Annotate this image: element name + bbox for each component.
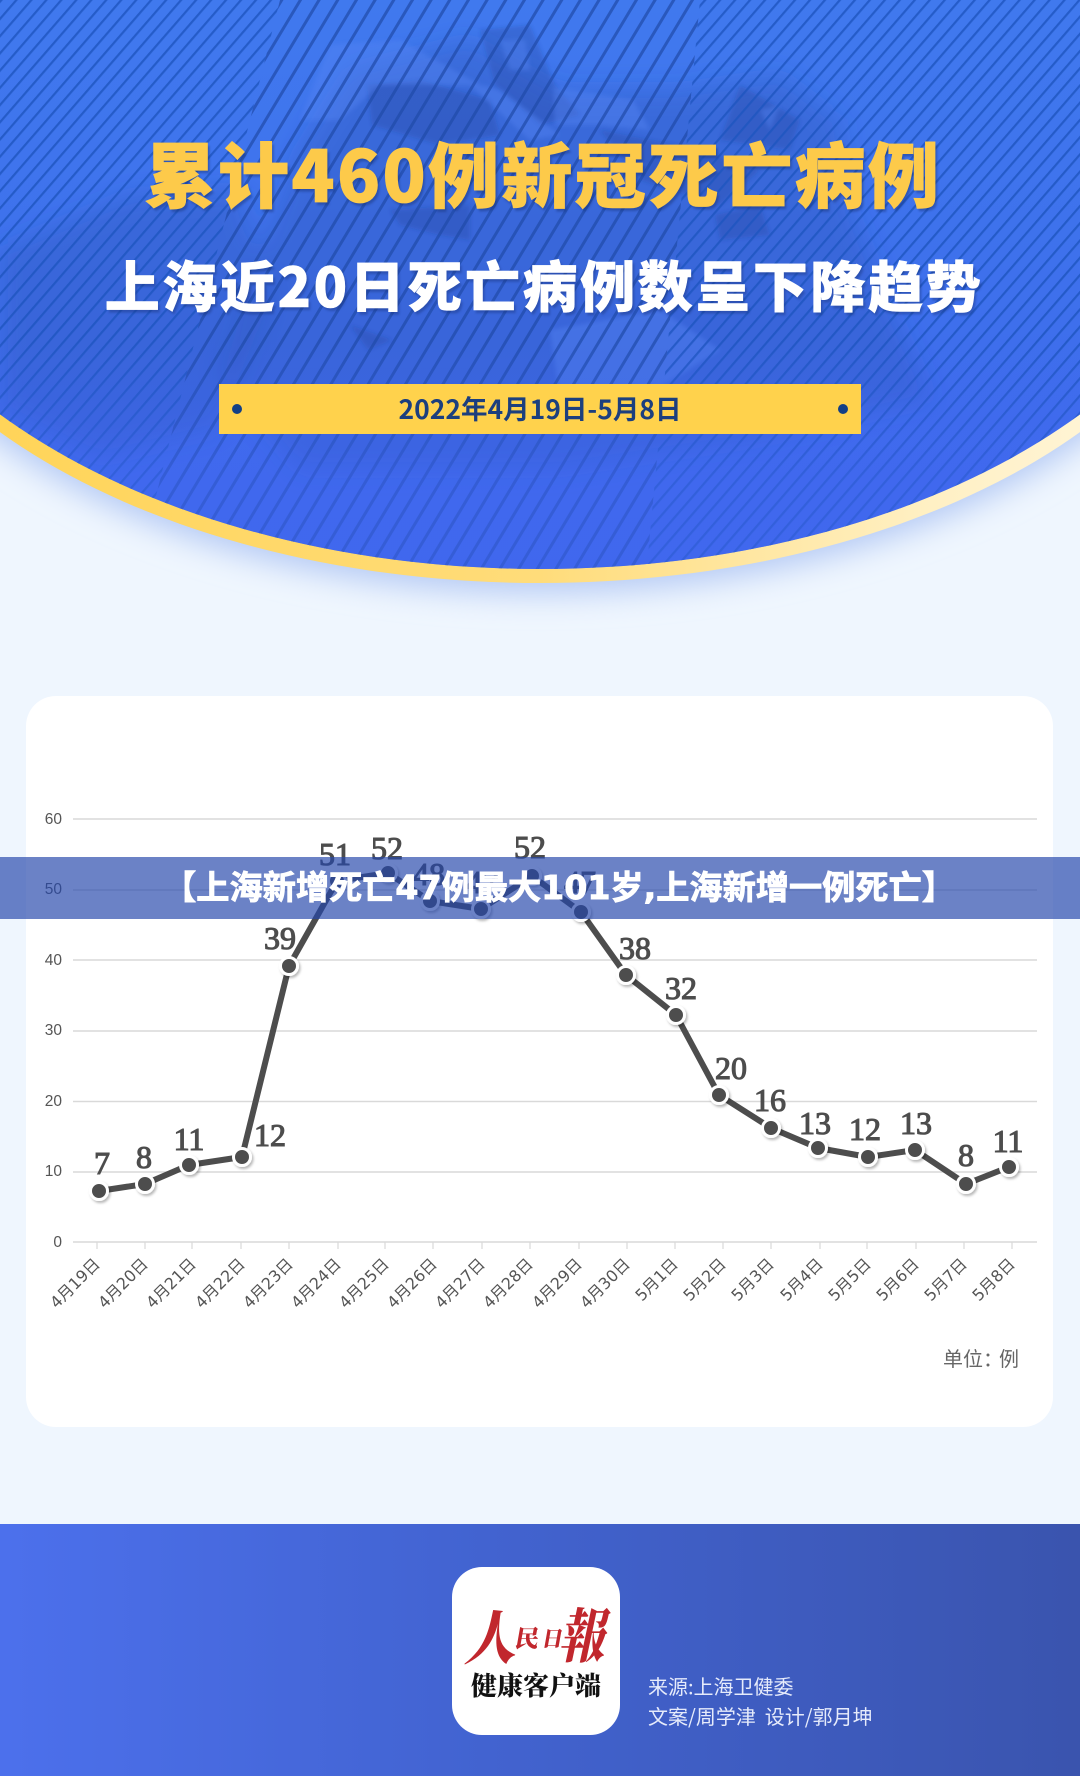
x axis date labels: 4月26日 [383,1254,441,1312]
y axis labels: 30 [45,1022,62,1039]
x axis date labels: 4月22日 [191,1254,249,1312]
logo tile [452,1567,620,1735]
unit label: 单位：例 [943,1343,1019,1372]
data value labels: 12 [254,1117,286,1153]
x axis date labels: 4月30日 [576,1254,634,1312]
data value labels: 52 [514,829,546,865]
data value labels: 47 [466,864,498,900]
banner headline overlay [0,857,1080,919]
x axis date labels: 5月8日 [968,1254,1019,1305]
x axis date labels: 4月23日 [239,1254,297,1312]
subtitle: 上海近20日死亡病例数呈下降趋势: 上海近20日死亡病例数呈下降趋势 [105,243,983,323]
x axis date labels: 4月20日 [94,1254,152,1312]
panel: header with curved blue background [0,0,1080,610]
data value labels: 32 [665,970,697,1006]
x axis date labels: 5月4日 [776,1254,827,1305]
data value labels: 47 [564,864,596,900]
data value labels: 8 [136,1139,152,1175]
data value labels: 16 [754,1082,786,1118]
panel: chart card [26,696,1053,1427]
date range text: 2022年4月19日-5月8日 [398,388,682,427]
x axis date labels: 4月25日 [335,1254,393,1312]
logo calligraphy: 人民日報: 民 [513,1619,543,1654]
x axis date labels: 5月5日 [824,1254,875,1305]
data value labels: 12 [849,1111,881,1147]
x axis date labels: 5月6日 [872,1254,923,1305]
logo calligraphy: 人民日報: 報 [554,1591,618,1675]
y axis labels: 40 [45,952,62,969]
panel: footer [0,1524,1080,1776]
data value labels: 48 [413,856,445,892]
y axis labels: 0 [53,1234,62,1251]
credits text [648,1671,873,1730]
x axis date labels: 4月24日 [287,1254,345,1312]
date bar [219,384,861,434]
icon: left dot [232,404,242,414]
source line: 来源:上海卫健委 [648,1671,794,1700]
logo subtitle: 健康客户端: 健康客户端 [471,1666,601,1703]
x axis date labels: 4月27日 [431,1254,489,1312]
icon: right dot [838,404,848,414]
x axis date labels: 5月7日 [920,1254,971,1305]
y axis labels: 60 [45,811,62,828]
logo calligraphy: 人民日報: 日 [540,1623,566,1653]
y axis labels [45,811,62,1251]
blue arc background with photo silhouette and stripes [0,0,1080,569]
data line [99,873,1009,1191]
y axis labels: 10 [45,1163,62,1180]
logo calligraphy: 人民日報: 人 [460,1592,530,1676]
data point markers [90,864,1018,1200]
y axis labels: 20 [45,1093,62,1110]
data value labels: 39 [264,920,296,956]
data value labels: 8 [958,1137,974,1173]
data value labels: 20 [715,1050,747,1086]
x axis date labels: 4月28日 [479,1254,537,1312]
data value labels: 52 [371,830,403,866]
title: 累计460例新冠死亡病例: 累计460例新冠死亡病例 [145,121,941,223]
data value labels: 13 [799,1105,831,1141]
data value labels: 7 [94,1145,110,1181]
y axis labels: 50 [45,881,62,898]
data value labels: 11 [174,1121,204,1157]
x axis date labels: 4月21日 [142,1254,200,1312]
author line: 文案/周学津 设计/郭月坤 [648,1701,873,1730]
data value labels: 51 [319,836,351,872]
logo calligraphy: 人民日報 [460,1591,618,1676]
x axis date labels: 4月29日 [528,1254,586,1312]
x axis date labels: 4月19日 [46,1254,104,1312]
data value labels [94,829,1023,1181]
x axis date labels: 5月2日 [679,1254,730,1305]
data value labels: 13 [900,1105,932,1141]
x axis date labels: 5月3日 [727,1254,778,1305]
data value labels: 11 [993,1123,1023,1159]
x axis date labels [46,1254,1019,1312]
banner text: 【上海新增死亡47例最大101岁,上海新增一例死亡】 [163,868,955,907]
yellow rim of the arc [0,0,1080,583]
data value labels: 38 [619,930,651,966]
x axis date labels: 5月1日 [631,1254,682,1305]
